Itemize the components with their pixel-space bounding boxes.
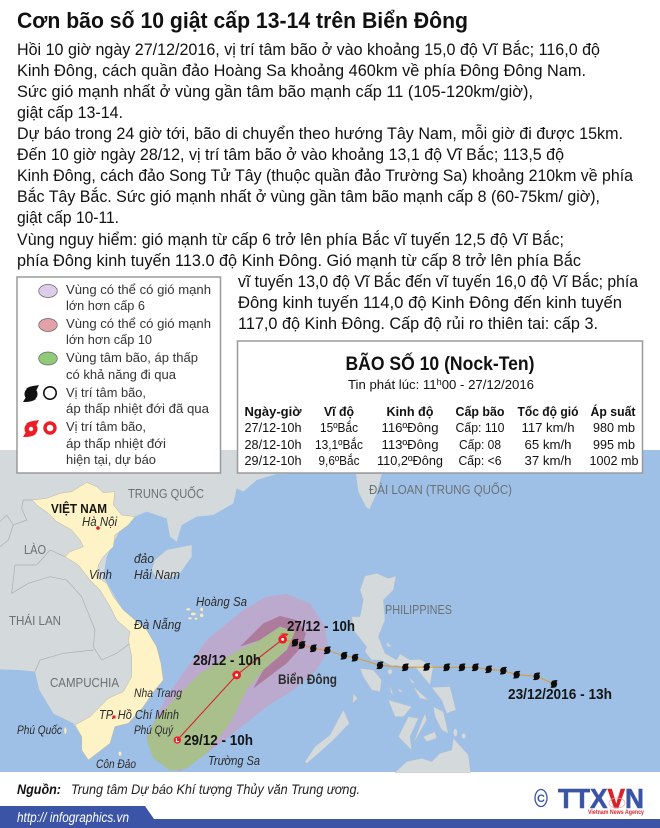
- legend text: current positions: Vị trí tâm bão,: [66, 419, 146, 434]
- legend icon: green zone: [39, 352, 57, 365]
- table row: 28/12: 13,1ºBắc: [315, 437, 363, 452]
- legend text: past positions: Vị trí tâm bão,: [66, 385, 146, 400]
- table subheading: 00 - 27/12/2016: [442, 377, 534, 392]
- table row: 29/12: [244, 453, 638, 468]
- table header row: Kinh độ: [386, 404, 434, 419]
- text block: storm description: Đến 10 giờ ngày 28/12, vị trí tâm bão ở vào khoảng 13,1 độ Vĩ Bắc; 113,5 độ: [17, 145, 564, 164]
- panel: storm data table: [238, 341, 642, 473]
- legend icon: purple zone: [39, 284, 57, 298]
- land: Vietnam: [32, 482, 163, 760]
- map label: Phú Quốc: Phú Quốc: [17, 725, 62, 737]
- map marker: TP. Hồ Chí Minh: [112, 716, 116, 718]
- table header row: Vĩ độ: [324, 404, 354, 419]
- table row: 28/12: 28/12-10h: [244, 437, 302, 452]
- map label: Thái Lan: THÁI LAN: [9, 613, 61, 628]
- text block: storm description: 117,0 độ Kinh Đông. Cấp độ rủi ro thiên tai: cấp 3.: [238, 314, 598, 333]
- table row: 28/12: Cấp: 08: [459, 437, 501, 452]
- table heading: BÃO SỐ 10 (Nock-Ten): [346, 353, 534, 375]
- logo: TTXVN: TTXVN: [558, 783, 644, 814]
- text block: storm description: vĩ tuyến 13,0 độ Vĩ Bắc đến vĩ tuyến 16,0 độ Vĩ Bắc; phía: [238, 272, 638, 291]
- table row: 27/12: 980 mb: [593, 420, 635, 435]
- legend text: level 10: [66, 316, 211, 347]
- storm zone: wind above level 6: [147, 594, 328, 772]
- text block: storm description: [17, 40, 638, 333]
- table row: 28/12: 995 mb: [593, 437, 635, 452]
- map label: Trường Sa: Trường Sa: [208, 754, 260, 768]
- map label: Việt Nam: VIỆT NAM: [51, 501, 107, 516]
- date label: 28/12: 28/12 - 10h: [193, 653, 261, 669]
- text block: storm description: Kinh Đông, cách đảo Song Tử Tây (thuộc quần đảo Trường Sa) khoảng 210km về phía: [17, 166, 633, 185]
- map label: Hoàng Sa: Hoàng Sa: [196, 595, 247, 609]
- legend text: storm path: Vùng tâm bão, áp thấp: [66, 350, 198, 365]
- legend text: past positions: áp thấp nhiệt đới đã qua: [66, 401, 210, 416]
- map label: Nha Trang: Nha Trang: [134, 688, 183, 700]
- legend text: past positions: [66, 385, 210, 416]
- map label: TP. Hồ Chí Minh: TP. Hồ Chí Minh: [99, 708, 179, 722]
- past track line (west part): [283, 639, 344, 656]
- map label: Vinh: Vinh: [89, 568, 112, 582]
- island: Hainan: [152, 545, 192, 580]
- map label: Philippines: PHILIPPINES: [385, 603, 452, 617]
- map label: Phú Quý: Phú Quý: [134, 725, 174, 737]
- date label: 27/12: 27/12 - 10h: [287, 619, 355, 635]
- legend text: current positions: áp thấp nhiệt đới: [66, 436, 166, 451]
- date label: 23/12/2016: 23/12/2016 - 13h: [508, 687, 612, 703]
- footer bar: [0, 806, 660, 828]
- islands: Philippines: [305, 573, 471, 773]
- table header row: [244, 404, 636, 419]
- legend text: level 6: [66, 282, 211, 313]
- map marker: Hà Nội: [96, 526, 100, 530]
- table row: 27/12: 15ºBắc: [320, 420, 358, 435]
- legend text: current positions: hiện tại, dự báo: [66, 452, 156, 467]
- legend icon: past storm positions: [23, 385, 56, 402]
- storm zone: forecast path area: [147, 627, 295, 771]
- map: [0, 450, 660, 773]
- table row: 28/12: 65 km/h: [524, 437, 572, 452]
- island: Taiwan: [356, 474, 382, 509]
- table row: 28/12: 113ºĐông: [382, 437, 438, 452]
- text block: storm description: Vùng nguy hiểm: gió mạnh từ cấp 6 trở lên phía Bắc vĩ tuyến 12,5 độ Vĩ Bắc;: [17, 230, 564, 249]
- map label: Đài Loan: ĐÀI LOAN (TRUNG QUỐC): [369, 482, 512, 497]
- text block: storm description: Sức gió mạnh nhất ở vùng gần tâm bão mạnh cấp 11 (105-120km/giờ),: [17, 82, 533, 101]
- table row: 29/12: 1002 mb: [590, 453, 638, 468]
- map label: Hà Nội: Hà Nội: [82, 515, 118, 529]
- legend icon: current storm positions: [23, 420, 55, 437]
- source line: Trung tâm Dự báo Khí tượng Thủy văn Trung ương.: [71, 781, 360, 797]
- title: Cơn bão số 10 giật cấp 13-14 trên Biển Đông: [17, 8, 468, 33]
- marker: 27/12: [278, 633, 289, 644]
- logo: TTXVN: C: [537, 793, 545, 805]
- table row: 27/12: [244, 420, 635, 435]
- table row: 29/12: 37 km/h: [524, 453, 572, 468]
- table row: 27/12: 27/12-10h: [244, 420, 302, 435]
- table row: 29/12: 9,6ºBắc: [318, 453, 360, 468]
- text block: storm description: phía Đông kinh tuyến 113.0 độ Kinh Đông. Gió mạnh từ cấp 8 trở lên phía Bắc: [17, 251, 581, 270]
- logo: TTXVN: Vietnam News Agency: [588, 810, 645, 816]
- table row: 27/12: Cấp: 110: [456, 420, 504, 435]
- table header row: Áp suất: [590, 404, 636, 419]
- past track line (east part): [344, 656, 554, 684]
- map label: Biển Đông: Biển Đông: [278, 671, 337, 687]
- marker: 29/12: [174, 736, 181, 744]
- legend text: level 6: Vùng có thể có gió mạnh: [66, 282, 211, 297]
- land: China, Laos, Thailand, Cambodia: [0, 450, 300, 737]
- panel: legend: [17, 277, 220, 473]
- text block: storm description: Dự báo trong 24 giờ tới, bão di chuyển theo hướng Tây Nam, mỗi giờ đi được 15km.: [17, 124, 623, 143]
- table row: 29/12: 29/12-10h: [244, 453, 302, 468]
- footer url: http:// infographics.vn: [17, 810, 129, 825]
- table row: 29/12: 110,2ºĐông: [377, 453, 443, 468]
- past positions (east part): [340, 652, 558, 688]
- map label: đảo Hải Nam: [134, 552, 180, 582]
- text block: storm description: giật cấp 10-11.: [17, 208, 119, 227]
- islands: Hoàng Sa, Phú Quốc, Côn Đảo: [64, 607, 204, 756]
- source line: Nguồn:: [17, 781, 61, 797]
- legend text: storm path: có khả năng đi qua: [66, 367, 177, 382]
- text block: storm description: Bắc Tây Bắc. Sức gió mạnh nhất ở vùng gần tâm bão mạnh cấp 8 (60-75km/ giờ),: [17, 187, 600, 206]
- table header row: Cấp bão: [456, 404, 505, 419]
- table subheading: h: [437, 377, 442, 387]
- table row: 27/12: 116ºĐông: [382, 420, 438, 435]
- table header row: Ngày-giờ: [244, 404, 302, 419]
- map label: Đà Nẵng: Đà Nẵng: [134, 618, 181, 632]
- text block: storm description: Hồi 10 giờ ngày 27/12/2016, vị trí tâm bão ở vào khoảng 15,0 độ Vĩ Bắc; 116,0 độ: [17, 40, 600, 59]
- table row: 27/12: 117 km/h: [522, 420, 574, 435]
- map label: Côn Đảo: Côn Đảo: [96, 759, 137, 771]
- table subheading: Tin phát lúc: 11: [348, 377, 435, 392]
- forecast track line: [177, 639, 283, 740]
- text block: storm description: Đông kinh tuyến 114,0 độ Kinh Đông đến kinh tuyến: [238, 293, 622, 312]
- table row: 29/12: Cấp: <6: [458, 453, 502, 468]
- legend text: current positions: [66, 419, 166, 467]
- map label: đảo Hải Nam: đảo: [134, 552, 154, 566]
- legend text: level 6: lớn hơn cấp 6: [66, 298, 145, 313]
- legend text: level 10: Vùng có thể có gió mạnh: [66, 316, 211, 331]
- storm zone: wind above level 10: [240, 616, 306, 688]
- map label: đảo Hải Nam: Hải Nam: [134, 568, 180, 582]
- legend text: storm path: [66, 350, 198, 382]
- map label: Campuchia: CAMPUCHIA: [50, 676, 120, 690]
- table row: 28/12: [244, 437, 635, 452]
- legend text: level 10: lớn hơn cấp 10: [66, 332, 152, 347]
- country borders: [0, 500, 130, 672]
- legend icon: red zone: [39, 318, 57, 332]
- past positions (west part): [291, 639, 331, 654]
- text block: storm description: Kinh Đông, cách quần đảo Hoàng Sa khoảng 460km về phía Đông Đông Nam.: [17, 61, 586, 80]
- table header row: Tốc độ gió: [518, 404, 579, 419]
- date label: 29/12: 29/12 - 10h: [184, 733, 253, 749]
- text block: storm description: giật cấp 13-14.: [17, 103, 123, 122]
- map label: Trung Quốc: TRUNG QUỐC: [128, 486, 204, 501]
- map label: Lào: LÀO: [24, 542, 46, 557]
- marker: 28/12: [232, 671, 241, 679]
